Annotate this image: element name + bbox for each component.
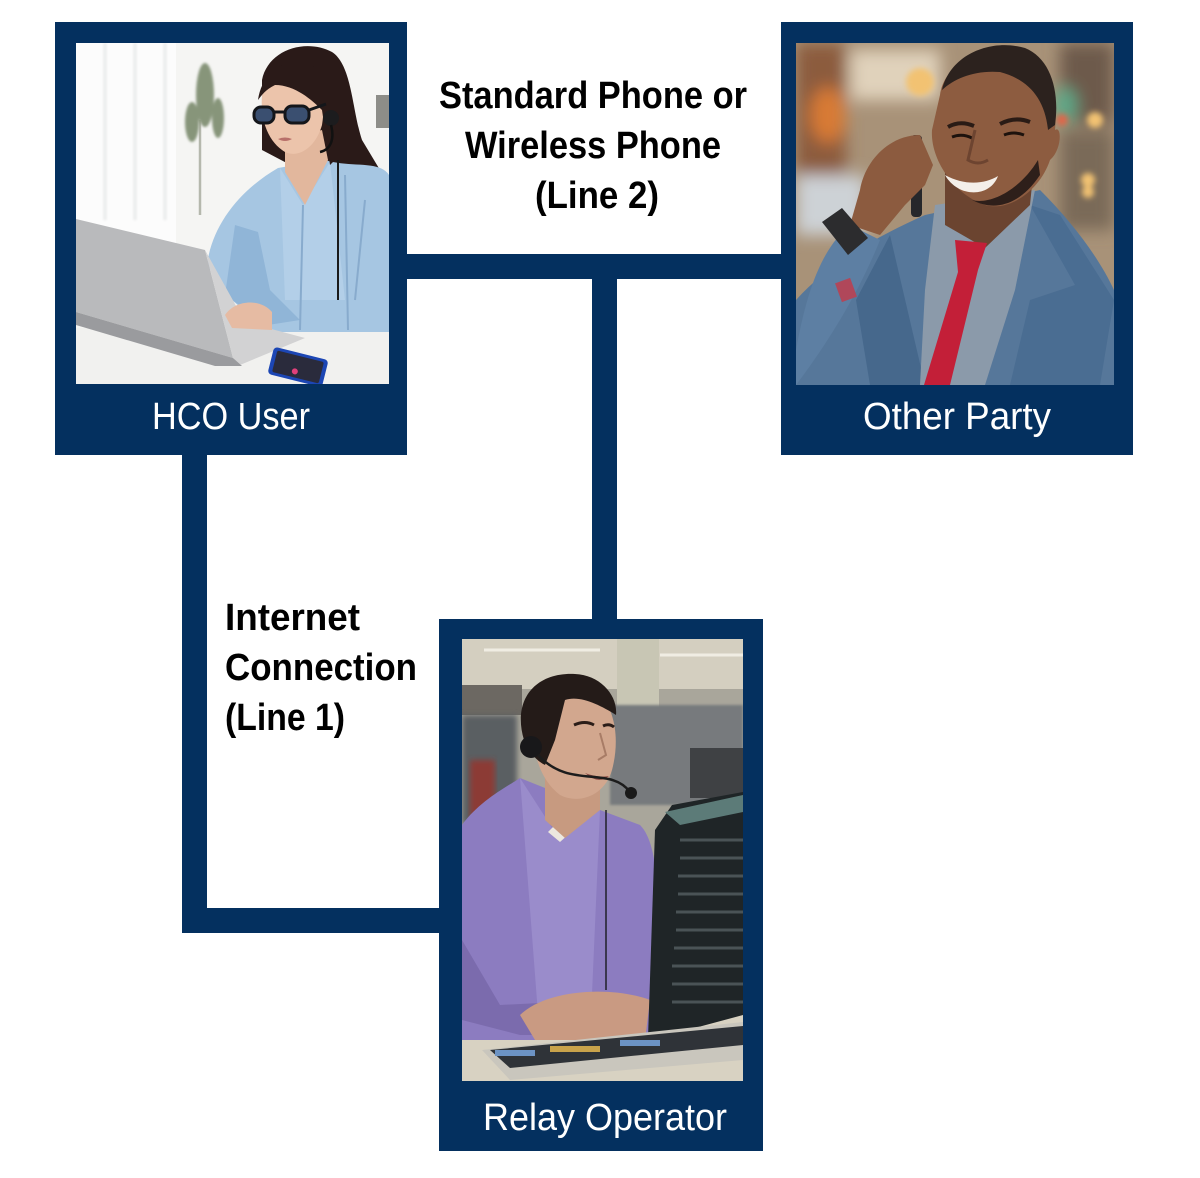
- name: other party: Other Party: [863, 396, 1051, 438]
- photo: smiling man on phone: [796, 43, 1114, 385]
- name: HCO User: HCO User: [152, 396, 310, 438]
- laptop: [76, 219, 233, 358]
- hair back: [262, 46, 378, 168]
- connector: line 2 between HCO user and other party: [400, 254, 790, 279]
- face features: [574, 722, 614, 780]
- lips: [278, 138, 292, 141]
- label: line 2: [439, 75, 747, 217]
- shirt: [207, 160, 389, 332]
- label: line 2: Wireless Phone: [465, 125, 721, 167]
- glasses: [254, 104, 326, 123]
- smile: [945, 175, 998, 192]
- eyes and nose: [948, 119, 1030, 163]
- keyboard: [482, 1022, 743, 1080]
- panel: other party: [781, 22, 1133, 455]
- panel: HCO user: [55, 22, 407, 455]
- label: line 1: [225, 597, 417, 739]
- neck: [945, 173, 1032, 248]
- watch: [822, 208, 868, 255]
- photo: operator at computer: [462, 639, 743, 1081]
- label: line 1: (Line 1): [225, 697, 345, 739]
- connector: line 2 branch to relay operator: [592, 270, 617, 625]
- monitor: [648, 792, 743, 1038]
- neck and head: [545, 778, 600, 838]
- desk: [462, 1015, 743, 1081]
- shirt: [920, 190, 1035, 385]
- panel: relay operator: [439, 619, 763, 1151]
- suit: [796, 190, 1114, 385]
- tie: [924, 240, 987, 385]
- hand: [225, 303, 272, 330]
- label: line 2: Standard Phone or: [439, 75, 747, 117]
- hands: [520, 992, 650, 1040]
- label: line 1: Internet: [225, 597, 360, 639]
- torso: [462, 778, 657, 1040]
- hand and arm: [850, 135, 933, 235]
- headset: [520, 736, 542, 758]
- neck and face: [285, 130, 328, 205]
- smartphone: [268, 348, 328, 384]
- connector: line 1 from HCO user to relay operator: [182, 450, 445, 933]
- head: [932, 72, 1060, 206]
- label: line 1: Connection: [225, 647, 417, 689]
- name: relay operator: Relay Operator: [483, 1097, 727, 1139]
- label: line 2: (Line 2): [535, 175, 659, 217]
- phone: [911, 135, 922, 217]
- photo: woman with headset at laptop: [76, 43, 389, 387]
